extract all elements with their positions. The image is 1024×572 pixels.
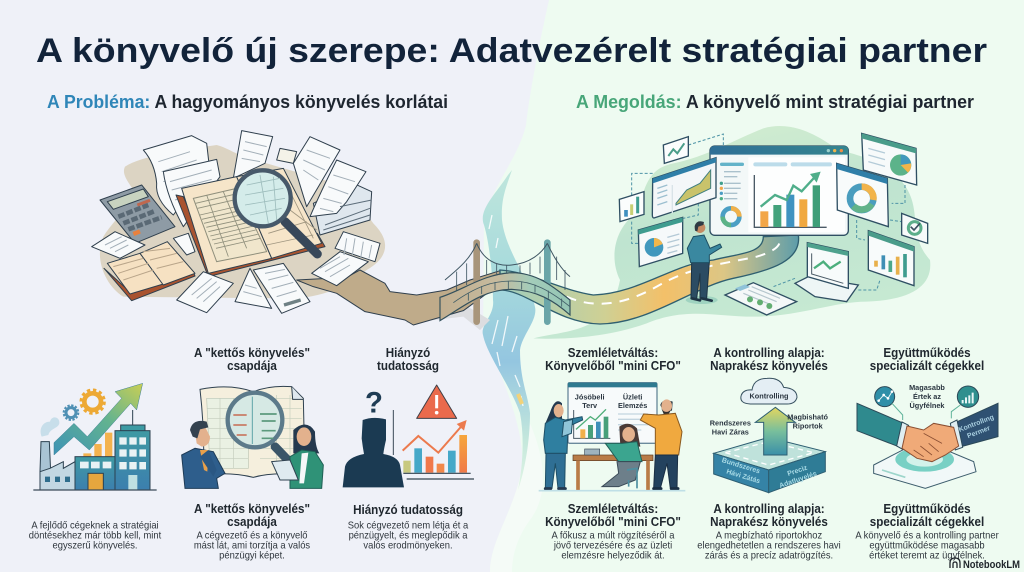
ledger sheets	[143, 136, 220, 227]
title: A könyvelő új szerepe: Adatvezérelt stratégiai partner	[36, 32, 987, 70]
col 3: missing awareness illustration	[343, 385, 474, 487]
label: monthly close: Havi Záras	[712, 428, 749, 437]
small open book	[104, 242, 195, 301]
column 2 lower heading: A "kettős könyvelés"	[194, 501, 310, 516]
label: reliable reports: Riportok	[793, 421, 824, 430]
cloud: Kontrolling	[749, 392, 789, 401]
orange bars	[83, 433, 112, 457]
right sleeve: Permer	[966, 425, 992, 440]
column 5 lower heading: Naprakész könyvelés	[710, 514, 828, 529]
label: higher value: Ügyfélnek	[909, 401, 945, 410]
handshake	[902, 423, 959, 462]
label: higher value: Magasabb	[909, 383, 945, 392]
bridge shadow	[405, 300, 490, 330]
green data landscape blob	[533, 126, 930, 339]
col 5: controlling foundation illustration	[710, 378, 829, 493]
base plate	[874, 440, 976, 488]
growth arrow	[54, 383, 143, 455]
panel: check icon	[902, 213, 928, 243]
presentation board	[568, 383, 657, 443]
column 2 body: mást lát, ami torzítja a valós	[194, 540, 310, 552]
label: reliable reports: Magbisható	[787, 413, 829, 422]
column 3 top heading: tudatosság	[377, 358, 439, 373]
ground shade	[539, 488, 685, 493]
column 2 top heading: A "kettős könyvelés"	[194, 345, 310, 360]
column 5 body: A megbízható riportokhoz	[716, 530, 822, 542]
question mark: ?	[365, 387, 383, 420]
column 4 body: jövő tervezésére és az üzleti	[553, 540, 672, 552]
back receipts	[233, 131, 372, 235]
river	[483, 170, 535, 490]
column 3 top heading: Hiányzó	[386, 345, 430, 360]
deck	[440, 273, 570, 321]
connector dashes	[632, 134, 905, 290]
panel: report pie	[862, 133, 917, 185]
column 4 lower heading: Szemléletváltás:	[568, 501, 658, 516]
woman with tablet	[272, 425, 323, 488]
label: monthly close: Rendszeres	[710, 419, 751, 428]
left sleeve	[857, 403, 905, 447]
panel: trend icon	[663, 137, 688, 163]
crumbling path	[297, 270, 501, 325]
column 3 body: pénzügyelt, és meglepődik a	[349, 530, 468, 542]
panel: bar report	[868, 231, 914, 286]
presentation board: Terv	[582, 401, 598, 410]
column 1 body: döntésekhez már több kell, mint	[29, 530, 161, 542]
illustration: paper pile	[92, 131, 501, 330]
icon: network	[875, 387, 903, 420]
col 1: growth illustration	[33, 383, 157, 490]
table	[573, 449, 653, 490]
bridge	[440, 243, 570, 322]
clipboard	[725, 283, 797, 315]
column 2 top heading: csapdája	[227, 358, 277, 373]
column 4 lower heading: Könyvelőből "mini CFO"	[545, 514, 681, 529]
column 6 top heading: specializált cégekkel	[870, 358, 984, 373]
column 6 lower heading: Együttműködés	[883, 501, 971, 516]
column 4 body: elemzésre helyeződik át.	[561, 550, 665, 562]
presentation board: Üzleti	[623, 392, 642, 401]
column 4 top heading: Könyvelőből "mini CFO"	[545, 358, 681, 373]
column 2 body: pénzügyi képet.	[219, 550, 285, 562]
woman with tablet	[544, 401, 583, 489]
column 5 body: elengedhetetlen a rendszeres havi	[697, 540, 841, 552]
column 1 body: A fejlődő cégeknek a stratégiai	[31, 520, 159, 532]
presentation board: Jósöbeli	[575, 392, 605, 401]
col 6: partnership illustration	[857, 383, 998, 488]
near-white river bank	[490, 400, 543, 572]
right sleeve: Kontrollıng	[958, 414, 995, 434]
illustration: data dashboard	[619, 133, 928, 315]
upward arrow	[755, 407, 795, 455]
suspension bridge and road	[500, 235, 799, 324]
loose receipts	[92, 232, 380, 313]
platform: Hávi Zátás	[725, 468, 761, 485]
small gear	[64, 405, 78, 420]
main monitor	[710, 146, 848, 235]
presentation board: Elemzés	[618, 401, 647, 410]
magnifying glass	[228, 393, 289, 462]
right sleeve	[950, 403, 998, 450]
tan ground stain	[100, 145, 385, 298]
column 3 body: valós erodmönyeken.	[363, 540, 453, 552]
column 6 top heading: Együttműködés	[883, 345, 971, 360]
seated analyst	[602, 424, 642, 488]
col 2: double bookkeeping illustration	[182, 386, 323, 488]
column 2 lower heading: csapdája	[227, 514, 277, 529]
column 5 lower heading: A kontrolling alapja:	[713, 501, 825, 516]
open ledger	[200, 386, 305, 477]
laptop	[795, 243, 858, 302]
platform: Preciz	[787, 464, 809, 478]
col 4: mini CFO illustration	[539, 383, 685, 491]
subtitle: problem: A Probléma: A hagyományos könyvelés korlátai	[47, 91, 448, 112]
column 5 top heading: A kontrolling alapja:	[713, 345, 825, 360]
office buildings	[75, 410, 150, 490]
panel: small bar icon	[619, 192, 644, 222]
panel: area chart	[652, 158, 716, 218]
platform: Adatluyelés	[778, 471, 818, 490]
column 5 body: zárás és a precíz adatrögzítés.	[705, 550, 833, 562]
silhouette	[343, 418, 404, 487]
road to dashboard	[500, 235, 799, 324]
column 1 body: egyszerű könyvelés.	[53, 540, 138, 552]
icon: notebook logo	[950, 558, 960, 568]
person viewing data	[686, 221, 722, 304]
large gear	[81, 390, 104, 413]
column 2 body: A cégvezető és a könyvelő	[196, 530, 308, 542]
icon: growth	[951, 386, 979, 418]
calculator	[100, 185, 175, 243]
label: higher value: Értek az	[913, 392, 941, 401]
column 4 body: A főkusz a múlt rögzítéséről a	[551, 530, 675, 542]
smoke	[41, 417, 59, 437]
magnifying glass	[235, 170, 317, 254]
column 6 body: együttműködése magasabb	[869, 540, 985, 552]
column 5 top heading: Naprakész könyvelés	[710, 358, 828, 373]
panel: pie	[638, 217, 683, 267]
platform	[714, 437, 825, 493]
large open ledger	[176, 168, 325, 277]
column 3 body: Sok cégvezető nem létja ét a	[348, 520, 469, 532]
river highlights	[489, 215, 523, 406]
man pointing	[640, 399, 682, 489]
column 6 lower heading: specializált cégekkel	[870, 514, 984, 529]
towers	[467, 243, 487, 322]
subtitle: solution: A Megoldás: A könyvelő mint stratégiai partner	[576, 91, 974, 112]
ground line	[33, 488, 157, 492]
warning triangle	[417, 385, 457, 418]
factory	[40, 442, 75, 490]
column 4 top heading: Szemléletváltás:	[568, 345, 658, 360]
column 6 body: értéket teremt az ügyfélnek.	[869, 550, 985, 562]
river yellow accent	[518, 394, 522, 404]
background: solution side	[483, 0, 1024, 572]
column 3 lower heading: Hiányzó tudatosság	[353, 502, 463, 517]
road centre line	[567, 240, 780, 304]
panel: donut	[837, 163, 888, 227]
problem bar chart	[403, 420, 474, 479]
column 6 body: A könyvelő és a kontrolling partner	[855, 530, 999, 542]
man thinking	[182, 421, 225, 488]
platform: Bundszeres	[721, 457, 761, 475]
